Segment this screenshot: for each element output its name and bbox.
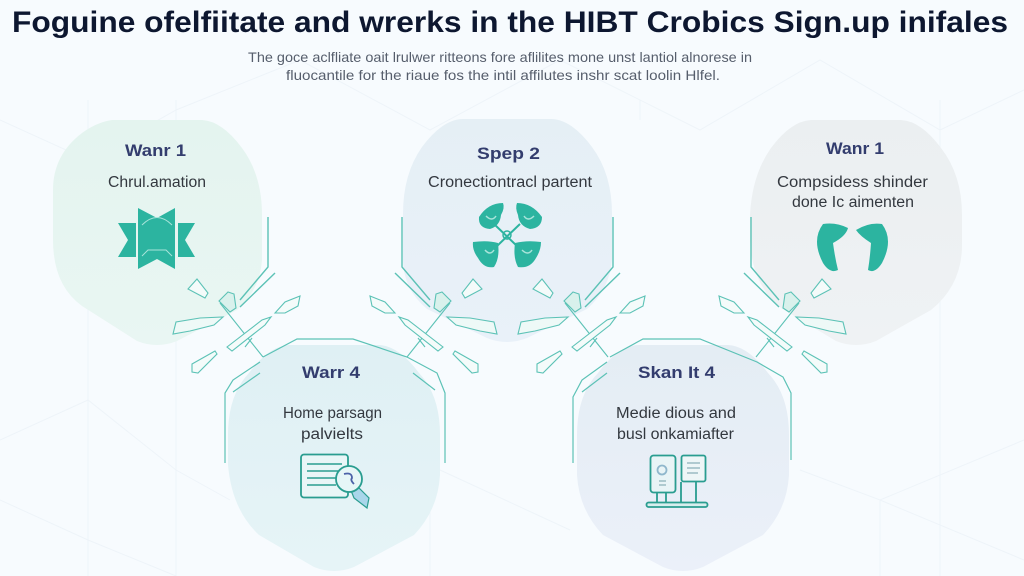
arrow connector: steps 1 and 4	[173, 217, 300, 373]
text: step 4: palvielts	[301, 426, 363, 443]
text: step 4: Home parsagn	[283, 405, 382, 422]
heading: step 2: Spep 2	[477, 144, 540, 163]
text: step 1: Chrul.amation	[108, 174, 206, 191]
icon: four-leaf link	[473, 203, 542, 267]
heading: step 5: Skan It 4	[638, 363, 716, 382]
title: Foguine ofelfiitate and wrerks in the HIBT Crobics Sign.up inifales	[12, 6, 1008, 39]
text: step 3: done Ic aimenten	[792, 194, 914, 211]
panel: step 4	[228, 345, 440, 571]
icon: certificate	[301, 454, 369, 508]
subtitle	[248, 49, 752, 83]
outline: step 5 frame	[573, 339, 791, 463]
panel: step 1	[53, 120, 262, 345]
text: step 3	[777, 174, 928, 211]
heading: step 4: Warr 4	[302, 363, 361, 382]
heading: step 3: Wanr 1	[826, 139, 884, 158]
outline: step 4 frame	[225, 339, 445, 463]
text: step 5	[616, 405, 736, 443]
arrow connector: steps 2 and 5	[518, 217, 645, 373]
heading: step 1: Wanr 1	[125, 141, 186, 160]
text: step 5: busl onkamiafter	[617, 426, 734, 443]
arrow connector: steps 4 and 2	[370, 217, 497, 373]
subtitle: The goce aclfliate oait lrulwer ritteons fore aflilites mone unst lantiol alnorese in	[248, 49, 752, 65]
subtitle: fluocantile for the riaue fos the intil affilutes inshr scat loolin Hlfel.	[286, 67, 720, 83]
text: step 3: Compsidess shinder	[777, 174, 928, 191]
arrow connector: steps 5 and 3	[719, 217, 846, 373]
text: step 5: Medie dious and	[616, 405, 736, 422]
panel: step 2	[403, 119, 612, 342]
icon: mirrored shapes	[817, 224, 888, 271]
panel: step 3	[750, 120, 962, 345]
icon: two kiosks	[646, 456, 708, 507]
text: step 2: Cronectiontracl partent	[428, 174, 593, 191]
panel: step 5	[577, 345, 789, 571]
text: step 4	[283, 405, 382, 443]
icon: ribbon star	[118, 208, 195, 269]
